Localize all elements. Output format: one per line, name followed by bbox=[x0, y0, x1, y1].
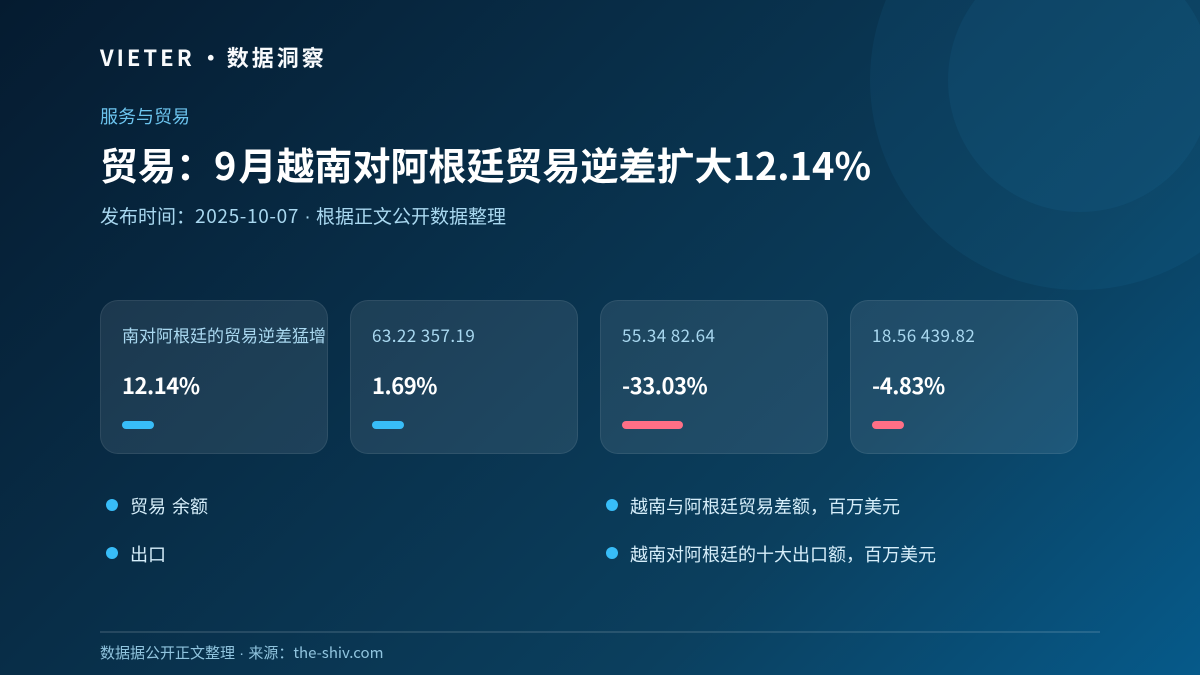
card 2 label: 63.22 357.19 bbox=[372, 322, 475, 347]
bullet: exports: 出口 bbox=[130, 541, 166, 567]
panel: metric card 4 bbox=[850, 300, 1078, 454]
card 3 label: 55.34 82.64 bbox=[622, 322, 715, 347]
title: 贸易：9月越南对阿根廷贸易逆差扩大12.14% bbox=[100, 136, 871, 191]
card 2 value: 1.69% bbox=[372, 369, 437, 401]
card 4 value: -4.83% bbox=[872, 369, 945, 401]
card 1 bar bbox=[122, 421, 154, 429]
panel: metric card 3 bbox=[600, 300, 828, 454]
brand line: · bbox=[200, 41, 222, 73]
card 1 value: 12.14% bbox=[122, 369, 200, 401]
card 3 value: -33.03% bbox=[622, 369, 707, 401]
card 4 bar bbox=[872, 421, 904, 429]
decorative large circle bbox=[870, 0, 1200, 290]
panel: metric card 2 bbox=[350, 300, 578, 454]
publish date subtitle: 发布时间：2025-10-07 · 根据正文公开数据整理 bbox=[100, 202, 506, 229]
decorative small circle bbox=[948, 0, 1200, 212]
bullet: top ten exports: 越南对阿根廷的十大出口额，百万美元 bbox=[630, 541, 936, 567]
card 2 bar bbox=[372, 421, 404, 429]
footer source: 数据据公开正文整理 · 来源：the-shiv.com bbox=[100, 642, 384, 663]
category label: 服务与贸易 bbox=[100, 103, 190, 129]
footer rule bbox=[100, 631, 1100, 633]
panel: metric card 1 bbox=[100, 300, 328, 454]
card 4 label: 18.56 439.82 bbox=[872, 322, 975, 347]
card 3 bar bbox=[622, 421, 683, 429]
bullet: exports bbox=[106, 541, 166, 567]
brand line: VIETER 数据洞察 bbox=[100, 41, 327, 73]
bullet: trade gap: 越南与阿根廷贸易差额，百万美元 bbox=[630, 493, 900, 519]
bullet: trade balance: 贸易 余额 bbox=[130, 493, 208, 519]
card 1 label: 南对阿根廷的贸易逆差猛增 bbox=[122, 322, 326, 347]
